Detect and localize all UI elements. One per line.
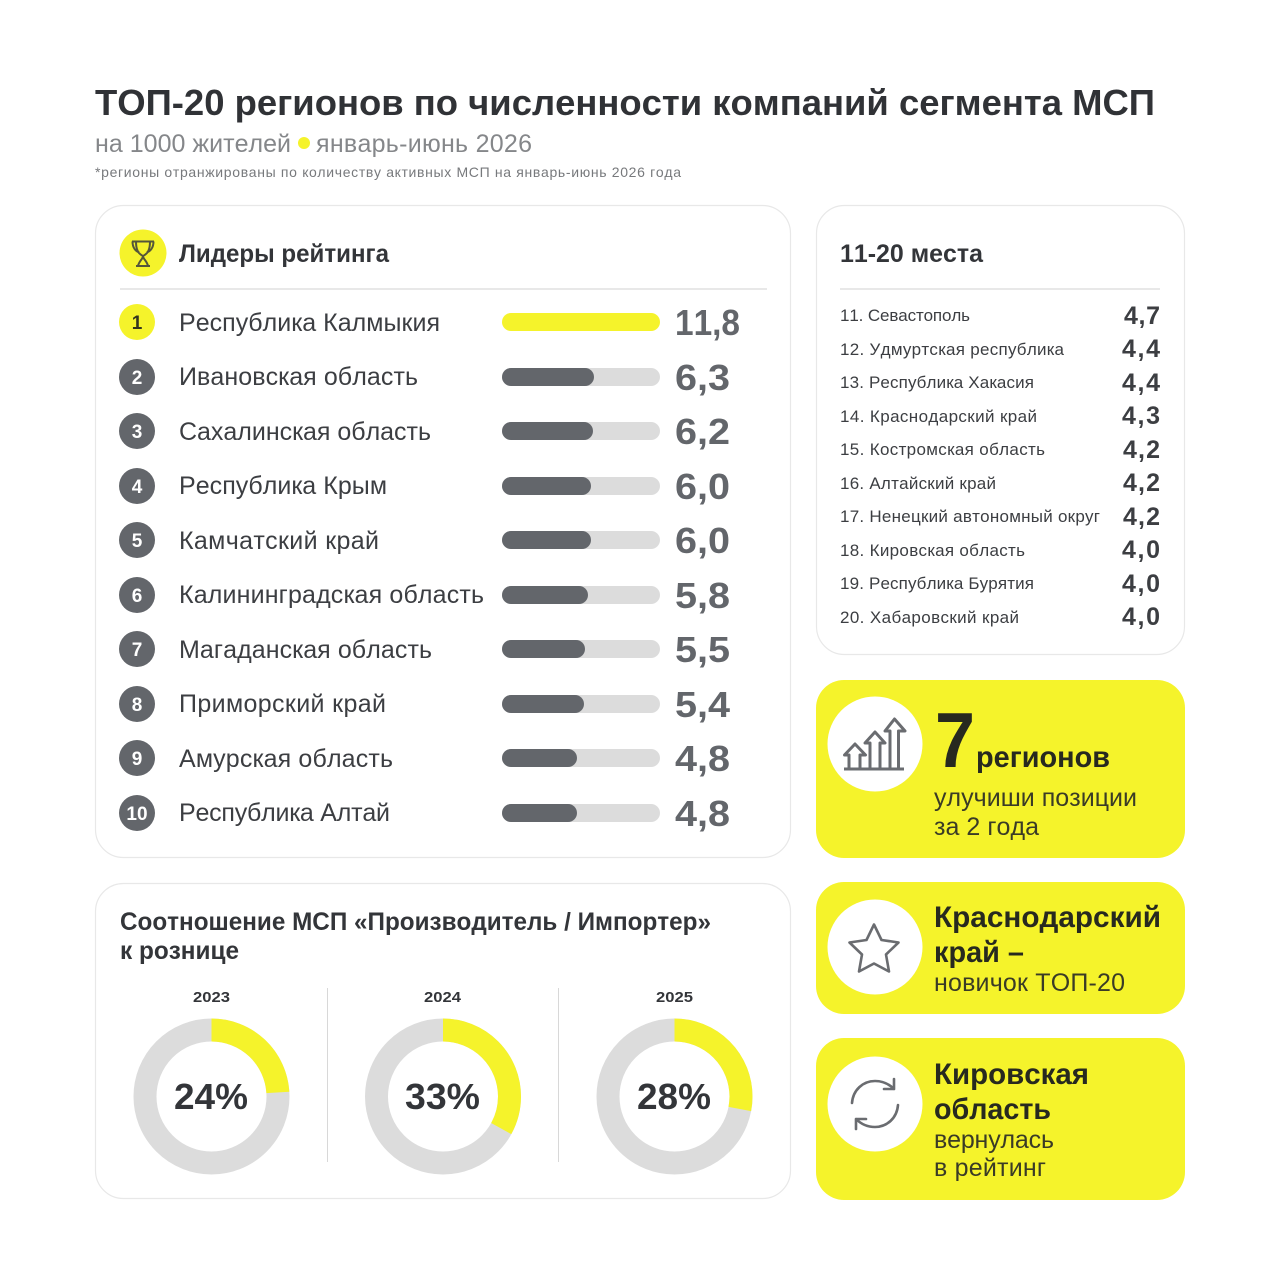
row 6 bbox=[119, 575, 730, 616]
row 6: Калининградская область bbox=[179, 581, 484, 609]
row 10: 10 bbox=[126, 804, 148, 825]
callout: Kirov: Кировская bbox=[934, 1058, 1089, 1091]
place 12 bbox=[840, 335, 1160, 363]
row 6: 5,8 bbox=[675, 575, 730, 616]
icon: trophy bbox=[120, 230, 166, 276]
place 17 bbox=[840, 503, 1160, 531]
donut 2023 bbox=[145, 989, 278, 1163]
icon: refresh bbox=[828, 1056, 922, 1152]
callout: Krasnodar: Краснодарский bbox=[934, 901, 1161, 934]
row 2: Ивановская область bbox=[179, 363, 418, 391]
row 2 bbox=[119, 357, 730, 398]
icon: rising arrows bbox=[828, 696, 922, 792]
row 1: Республика Калмыкия bbox=[179, 309, 440, 337]
row 6: 6 bbox=[132, 586, 142, 607]
callout: Kirov bbox=[816, 1038, 1185, 1200]
row 8 bbox=[119, 684, 730, 725]
row 5 bbox=[119, 520, 730, 561]
row 10: Республика Алтай bbox=[179, 799, 390, 827]
row 7: 7 bbox=[132, 640, 142, 661]
donut 2023: 2023 bbox=[193, 989, 230, 1006]
place 16: 16. Алтайский край bbox=[840, 474, 996, 493]
place 15: 15. Костромская область bbox=[840, 440, 1045, 459]
row 10 bbox=[119, 793, 730, 834]
callout: 7 regions: улучиши позиции bbox=[934, 784, 1137, 812]
row 9: 9 bbox=[132, 749, 142, 770]
callout: 7 regions: регионов bbox=[976, 741, 1110, 774]
heading: ratio: к рознице bbox=[120, 937, 239, 965]
callout: Kirov: вернулась bbox=[934, 1126, 1054, 1154]
row 8: 5,4 bbox=[675, 684, 730, 725]
place 16 bbox=[840, 469, 1160, 497]
donut 2024: 2024 bbox=[424, 989, 462, 1006]
row 4: 4 bbox=[132, 477, 143, 498]
row 5: 5 bbox=[132, 531, 143, 552]
subtitle: январь-июнь 2026 bbox=[316, 130, 532, 158]
panel: places 11-20 bbox=[816, 206, 1184, 654]
place 11: 11. Севастополь bbox=[840, 306, 970, 325]
donut 2025: 2025 bbox=[656, 989, 693, 1006]
row 2: 6,3 bbox=[675, 357, 730, 398]
place 18 bbox=[840, 536, 1160, 564]
donut 2025 bbox=[608, 989, 741, 1163]
heading: ratio: Соотношение МСП «Производитель / Импортер» bbox=[120, 908, 711, 936]
callout: Kirov: в рейтинг bbox=[934, 1154, 1046, 1182]
place 14: 14. Краснодарский край bbox=[840, 407, 1037, 426]
row 10: 4,8 bbox=[675, 793, 730, 834]
row 1: 1 bbox=[132, 313, 143, 334]
row 9 bbox=[119, 738, 730, 779]
place 15 bbox=[840, 436, 1160, 464]
place 17: 4,2 bbox=[1123, 503, 1160, 531]
row 4 bbox=[119, 466, 730, 507]
place 20: 4,0 bbox=[1122, 603, 1160, 631]
row 3: 6,2 bbox=[675, 411, 730, 452]
row 7: Магаданская область bbox=[179, 636, 432, 664]
callout: Krasnodar bbox=[816, 882, 1185, 1014]
place 17: 17. Ненецкий автономный округ bbox=[840, 507, 1100, 526]
row 1: 11,8 bbox=[675, 302, 740, 343]
subtitle bbox=[95, 130, 532, 158]
place 18: 4,0 bbox=[1122, 536, 1160, 564]
row 1 bbox=[119, 302, 740, 343]
place 16: 4,2 bbox=[1123, 469, 1160, 497]
donut 2024: 33% bbox=[405, 1076, 480, 1117]
row 8: Приморский край bbox=[179, 690, 386, 718]
place 13: 13. Республика Хакасия bbox=[840, 373, 1034, 392]
place 14 bbox=[840, 402, 1160, 430]
title: ТОП-20 регионов по численности компаний сегмента МСП bbox=[95, 82, 1155, 123]
heading: leaders: Лидеры рейтинга bbox=[179, 240, 390, 268]
callout: Krasnodar: край – bbox=[934, 936, 1024, 969]
row 4: 6,0 bbox=[675, 466, 730, 507]
place 11 bbox=[840, 302, 1160, 330]
row 7: 5,5 bbox=[675, 629, 730, 670]
row 9: 4,8 bbox=[675, 738, 730, 779]
place 19 bbox=[840, 570, 1160, 598]
row 8: 8 bbox=[132, 695, 142, 716]
place 15: 4,2 bbox=[1123, 436, 1160, 464]
place 19: 4,0 bbox=[1122, 570, 1160, 598]
row 7 bbox=[119, 629, 730, 670]
place 18: 18. Кировская область bbox=[840, 541, 1025, 560]
donut 2025: 28% bbox=[637, 1076, 711, 1117]
heading: ratio bbox=[120, 908, 711, 965]
callout: 7 regions bbox=[816, 680, 1185, 858]
heading: 11-20: 11-20 места bbox=[840, 240, 984, 268]
place 13 bbox=[840, 369, 1160, 397]
panel: ratio donuts bbox=[96, 884, 790, 1198]
callout: Kirov: область bbox=[934, 1093, 1051, 1126]
row 3: Сахалинская область bbox=[179, 418, 431, 446]
row 5: 6,0 bbox=[675, 520, 730, 561]
place 14: 4,3 bbox=[1122, 402, 1160, 430]
place 20: 20. Хабаровский край bbox=[840, 608, 1019, 627]
row 2: 2 bbox=[132, 368, 142, 389]
subtitle: на 1000 жителей bbox=[95, 130, 291, 158]
footnote: *регионы отранжированы по количеству активных МСП на январь-июнь 2026 года bbox=[95, 164, 681, 180]
row 4: Республика Крым bbox=[179, 472, 387, 500]
row 5: Камчатский край bbox=[179, 527, 379, 555]
callout: 7 regions: за 2 года bbox=[934, 813, 1039, 841]
icon: star bbox=[828, 900, 922, 994]
callout: Krasnodar: новичок ТОП-20 bbox=[934, 969, 1125, 997]
callout: 7 regions: 7 bbox=[935, 696, 975, 784]
panel: leaders bbox=[96, 206, 790, 858]
donut 2023: 24% bbox=[174, 1076, 248, 1117]
donut 2024 bbox=[376, 989, 510, 1163]
place 13: 4,4 bbox=[1122, 369, 1160, 397]
row 3 bbox=[119, 411, 730, 452]
place 11: 4,7 bbox=[1124, 302, 1160, 330]
place 12: 4,4 bbox=[1122, 335, 1160, 363]
place 20 bbox=[840, 603, 1160, 631]
row 9: Амурская область bbox=[179, 745, 393, 773]
row 3: 3 bbox=[132, 422, 142, 443]
place 19: 19. Республика Бурятия bbox=[840, 574, 1034, 593]
place 12: 12. Удмуртская республика bbox=[840, 340, 1065, 359]
